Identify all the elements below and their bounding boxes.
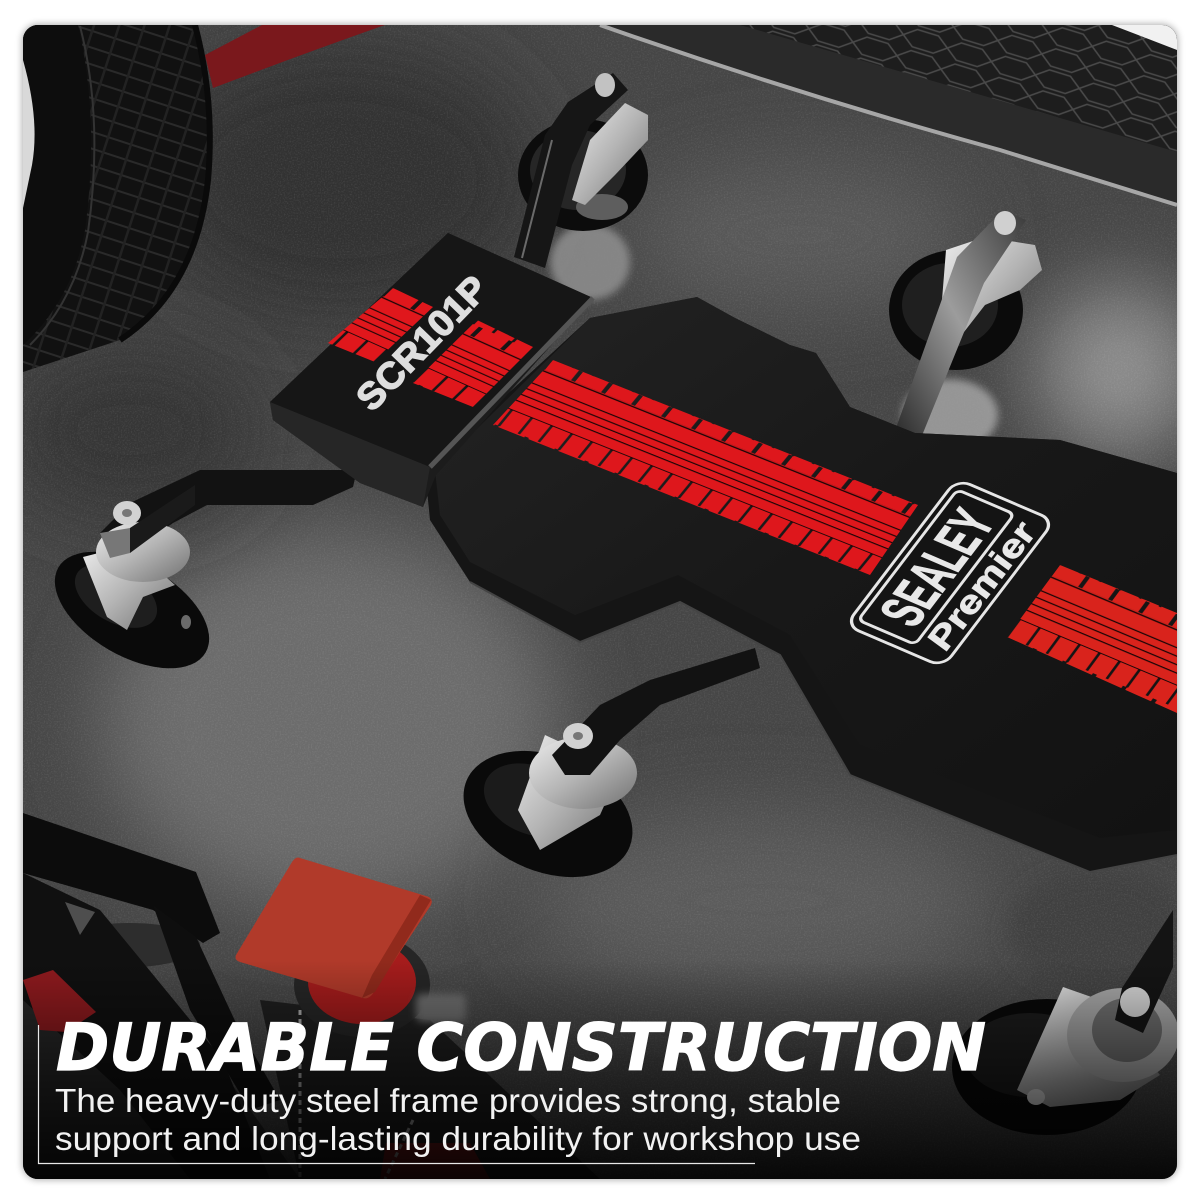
description text: support and long-lasting durability for workshop use <box>55 1120 861 1157</box>
model label: SCR101P <box>348 268 496 419</box>
body cushion <box>425 297 1177 872</box>
caster: front left <box>54 470 355 668</box>
red axle stand <box>236 858 600 1179</box>
Sealey Premier logo <box>846 479 1055 667</box>
head pad <box>270 233 593 507</box>
SEALEY wordmark: SEALEY <box>867 501 1009 635</box>
caster: right <box>889 210 1042 451</box>
title: DURABLE CONSTRUCTION <box>56 1011 986 1086</box>
red tread stripe: right section <box>1007 565 1177 713</box>
description text: The heavy-duty steel frame provides strong, stable <box>55 1082 841 1119</box>
car bumper and grille <box>600 25 1177 205</box>
axle stand frame <box>23 813 300 1179</box>
caster: bottom right <box>952 910 1179 1135</box>
red tread on pad: left section <box>328 288 433 362</box>
caster: front middle <box>464 648 760 878</box>
description text <box>55 1082 861 1157</box>
red wheel arch <box>205 25 385 88</box>
red tread stripe: left section <box>493 360 918 575</box>
tyre <box>23 25 210 372</box>
Premier wordmark: Premier <box>918 516 1047 655</box>
caster: top <box>514 73 648 300</box>
red tread on pad: right section <box>413 320 533 407</box>
caption frame <box>38 1025 755 1164</box>
bottom caption shade <box>23 960 1177 1179</box>
